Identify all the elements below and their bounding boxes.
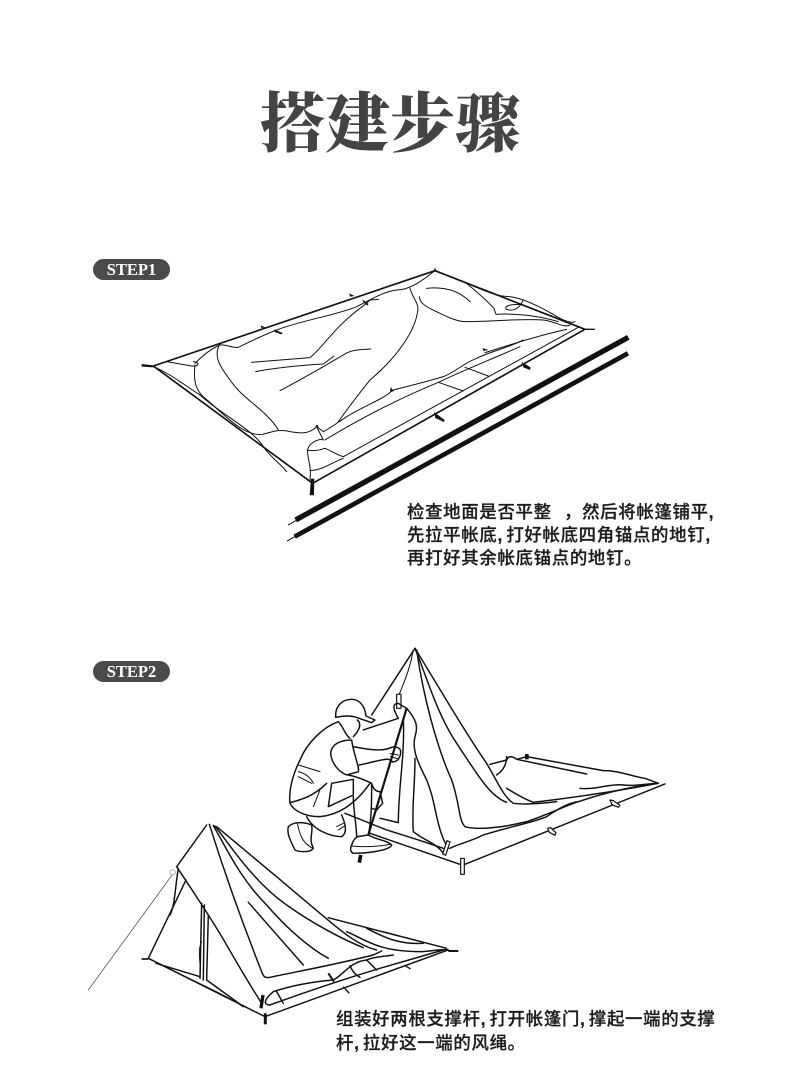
guy rope [88,870,175,990]
step 1 instructions: 再打好其余帐底锚点的地钉。 [407,548,642,568]
tent body [148,824,448,1017]
tarp folds [153,271,578,480]
tarp stakes [142,267,594,495]
tarp outline [153,271,585,483]
step 2 instructions: 杆,拉好这一端的风绳。 [336,1033,526,1053]
step 1 instructions: ，然后将帐篷铺平, [564,502,718,522]
person [288,699,407,853]
step 1 instructions: 先拉平帐底,打好帐底四角锚点的地钉, [407,525,714,545]
step 1 instructions: 检查地面是否平整 [407,502,552,522]
step 2 badge: STEP2 [107,662,156,681]
half raised tent [345,648,665,865]
step 2 badge [93,661,170,682]
step 1 instructions [407,502,718,568]
step 2 instructions: 组装好两根支撑杆,打开帐篷门,撑起一端的支撑 [336,1009,716,1029]
step 1 badge: STEP1 [107,260,156,279]
stakes [397,694,620,874]
step 1 badge [93,259,170,280]
pole being held [359,708,407,863]
stakes [142,951,458,1024]
title: 搭建步骤 [260,89,520,161]
tent poles [287,337,628,541]
step 2 instructions [336,1009,716,1053]
